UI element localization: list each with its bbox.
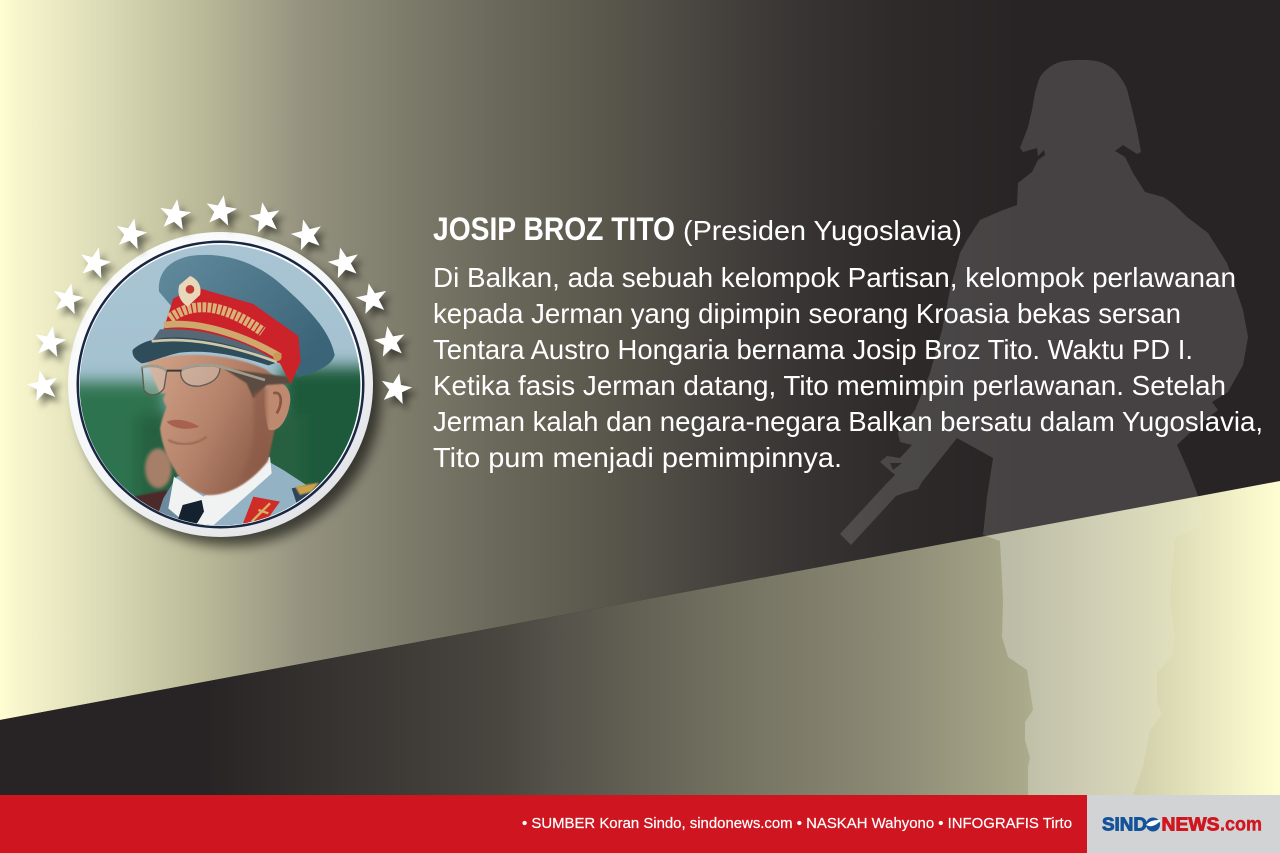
medallion ring <box>68 232 373 537</box>
source credits: • SUMBER Koran Sindo, sindonews.com • NASKAH Wahyono • INFOGRAFIS Tirto <box>522 815 1072 832</box>
logo globe <box>1146 818 1161 832</box>
heading: (Presiden Yugoslavia) <box>683 215 962 246</box>
body text: Tentara Austro Hongaria bernama Josip Broz Tito. Waktu PD I. <box>433 334 1193 365</box>
portrait of Josip Broz Tito <box>80 244 360 526</box>
body text: Di Balkan, ada sebuah kelompok Partisan, kelompok perlawanan <box>433 262 1236 293</box>
cap crown <box>159 255 335 377</box>
portrait medallion <box>53 232 387 548</box>
cap lower band <box>153 329 274 360</box>
body text: Jerman kalah dan negara-negara Balkan bersatu dalam Yugoslavia, <box>433 406 1263 437</box>
body text: Tito pum menjadi pemimpinnya. <box>433 442 842 473</box>
face <box>147 355 286 495</box>
footer bar <box>0 795 1087 853</box>
medallion shadow <box>77 242 381 546</box>
logo: SINDONEWS.com: .com <box>1220 814 1262 836</box>
logo: SINDONEWS.com: NEWS <box>1162 814 1220 834</box>
visor <box>132 337 277 365</box>
hair and cheek shading <box>223 368 290 398</box>
glasses <box>142 366 220 395</box>
cap badge <box>178 276 201 307</box>
body text: kepada Jerman yang dipimpin seorang Kroasia bekas sersan <box>433 298 1181 329</box>
logo: SINDONEWS.com <box>1087 795 1280 853</box>
ear <box>264 382 290 430</box>
gold laurel <box>170 307 263 332</box>
body text: Ketika fasis Jerman datang, Tito memimpin perlawanan. Setelah <box>433 370 1226 401</box>
heading: JOSIP BROZ TITO <box>433 211 675 247</box>
logo: SINDONEWS.com: SIND <box>1102 814 1147 834</box>
red band <box>163 287 301 384</box>
background: upper gradient panel <box>0 0 879 720</box>
soldier silhouette <box>840 60 1248 795</box>
background: lower gradient panel <box>0 480 1280 795</box>
ring of white stars <box>25 193 414 405</box>
body text <box>433 262 1263 473</box>
heading <box>433 211 962 247</box>
uniform <box>160 462 314 526</box>
